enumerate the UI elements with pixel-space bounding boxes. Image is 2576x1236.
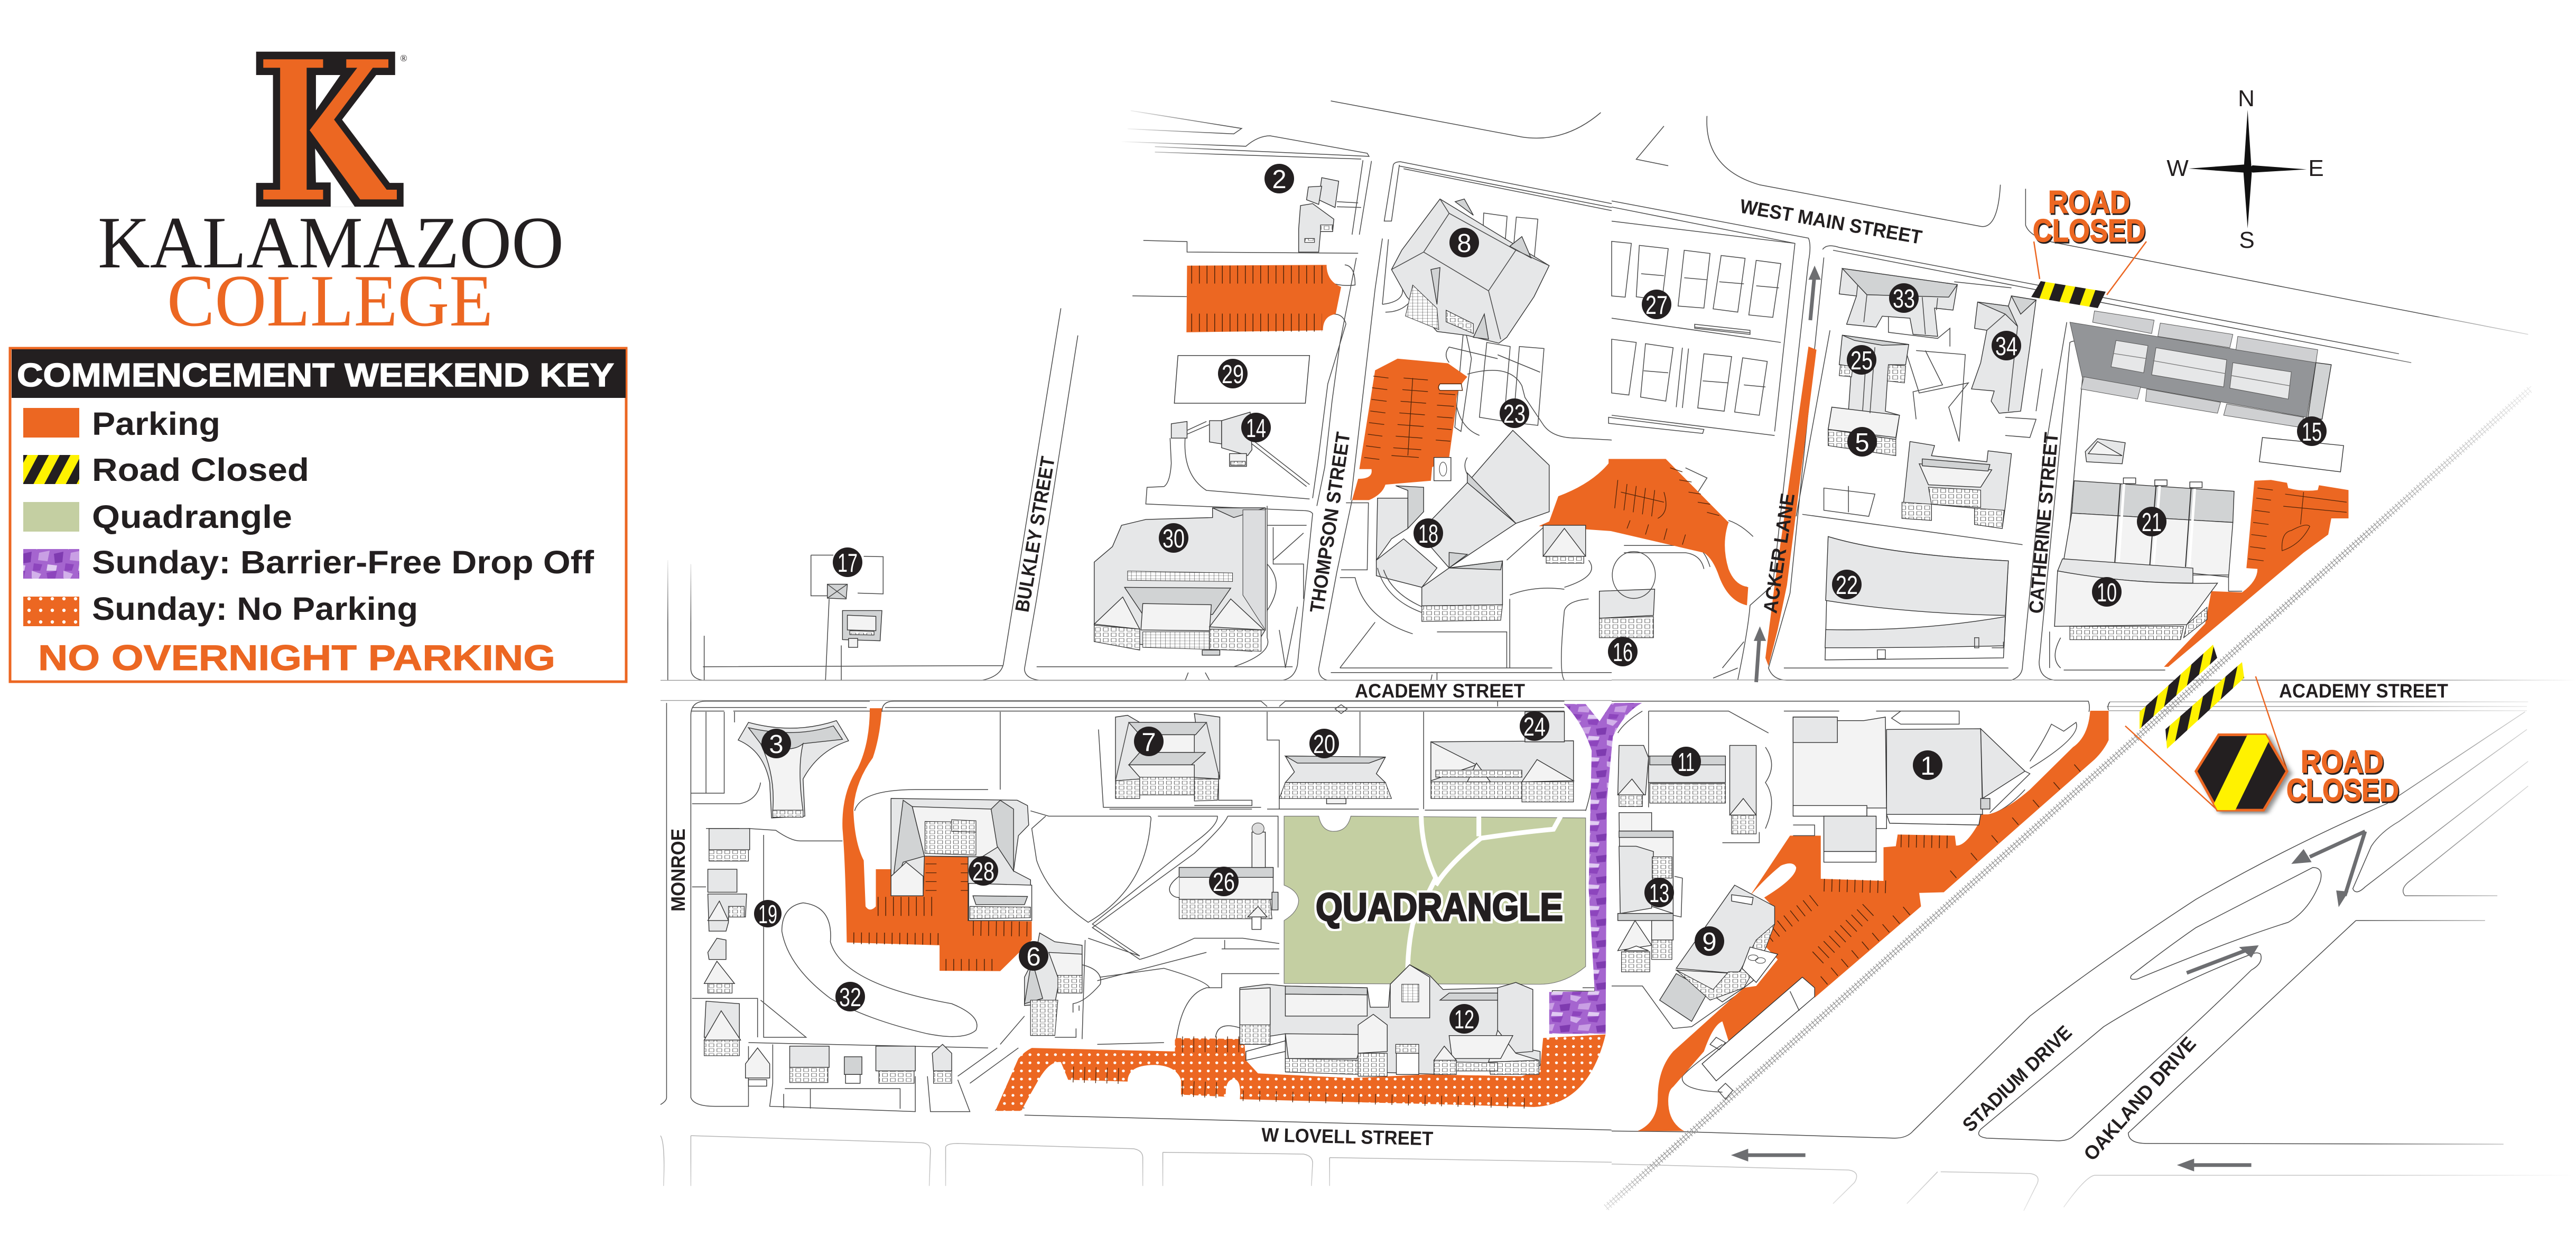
building 9	[1660, 885, 1778, 1021]
road closed label	[2286, 744, 2399, 808]
road closed label: CLOSED	[2033, 213, 2145, 248]
marker 1	[1913, 750, 1942, 780]
compass rose: S	[2239, 227, 2255, 253]
key item: no parking: Sunday: No Parking	[92, 591, 418, 627]
campus map	[655, 86, 2576, 1236]
marker 15: 15	[2302, 418, 2322, 447]
label: Catherine Street: CATHERINE STREET	[2025, 431, 2062, 615]
compass rose: W	[2166, 155, 2189, 181]
marker 28: 28	[972, 858, 994, 886]
parking: lot east of building 21	[2164, 480, 2348, 667]
marker 3	[761, 729, 791, 759]
marker 27: 27	[1645, 291, 1668, 320]
marker 8	[1449, 228, 1479, 258]
road closed label: ROAD	[2048, 184, 2130, 220]
building 3	[738, 721, 849, 818]
marker 2	[1264, 164, 1294, 194]
small house south of parking	[1543, 525, 1586, 563]
marker 6: 6	[1026, 943, 1041, 971]
marker 7	[1134, 727, 1164, 757]
marker 5	[1847, 427, 1877, 457]
building 34	[1971, 296, 2036, 413]
tennis courts	[1455, 213, 1781, 433]
marker 10: 10	[2097, 579, 2117, 607]
label: Monroe: MONROE	[667, 829, 689, 912]
marker 8: 8	[1457, 229, 1472, 258]
marker 30: 30	[1163, 525, 1185, 553]
marker 17: 17	[838, 549, 858, 578]
marker 6	[1019, 941, 1048, 971]
lot by 15	[2259, 438, 2343, 472]
building 24	[1431, 712, 1574, 802]
building 13	[1618, 813, 1682, 972]
marker 25: 25	[1850, 347, 1873, 375]
parking: north lot by Thompson Street	[1186, 265, 1341, 332]
building 17	[811, 555, 883, 647]
arrows: Stadium and Lovell	[1731, 831, 2365, 1172]
parking: lot east of building 18	[1539, 459, 1748, 606]
depot	[1702, 977, 1815, 1099]
road closed label: ROAD	[2301, 744, 2384, 779]
road closed: Academy Street rail crossing	[2125, 645, 2399, 813]
building 10	[2054, 559, 2242, 640]
key item: quadrangle	[23, 499, 292, 535]
traffic direction arrows	[1731, 266, 2365, 1172]
logo wordmark: COLLEGE	[167, 260, 493, 342]
marker 18: 18	[1418, 520, 1438, 549]
key item: barrier-free drop off: Sunday: Barrier-Free Drop Off	[92, 544, 594, 580]
key heading	[12, 349, 626, 398]
numbered building markers	[754, 164, 2327, 1034]
marker 3: 3	[769, 730, 784, 759]
marker 32: 32	[839, 983, 861, 1012]
label: Oakland Drive: OAKLAND DRIVE	[2079, 1033, 2200, 1165]
key item: parking: Parking	[92, 406, 220, 442]
marker 19	[754, 900, 782, 929]
key heading: COMMENCEMENT WEEKEND KEY	[17, 357, 614, 394]
marker 20: 20	[1313, 730, 1335, 759]
marker 29: 29	[1222, 360, 1244, 389]
marker 34: 34	[1995, 332, 2017, 361]
quadrangle label: QUADRANGLE	[1316, 885, 1563, 929]
buildings: southwest campus	[704, 712, 1574, 1086]
building 28	[891, 798, 1032, 921]
building 8	[1391, 199, 1549, 343]
railroad tracks	[1606, 386, 2531, 1210]
small house	[2085, 439, 2125, 464]
lawn lot 29	[1174, 356, 1309, 403]
key item: road closed	[23, 452, 309, 488]
building 25 and 5	[1828, 335, 1909, 456]
building 21	[2064, 478, 2234, 577]
marker 19: 19	[758, 900, 777, 929]
parking lots	[842, 265, 2348, 1131]
parking: main lot beside tracks	[1638, 711, 2109, 1131]
label: Thompson Street: THOMPSON STREET	[1306, 431, 1354, 614]
building 11	[1618, 746, 1772, 843]
marker 24: 24	[1523, 713, 1546, 741]
parking: lot beside building 23	[1352, 359, 1467, 500]
road network	[661, 101, 2576, 1211]
compass rose: N	[2238, 86, 2255, 111]
barrier-free drop off zone	[1549, 703, 1642, 1034]
building 16	[1599, 552, 1656, 638]
building 26	[1169, 823, 1278, 930]
logo wordmark: ®	[400, 53, 407, 63]
marker 22: 22	[1836, 571, 1858, 600]
compass rose: E	[2308, 155, 2324, 181]
road closed label: CLOSED	[2286, 773, 2399, 808]
houses along Monroe	[704, 829, 770, 1086]
parking: Sunday no parking zone	[996, 1035, 1606, 1111]
parking: lot beside building 28	[842, 708, 1032, 971]
panel: commencement weekend key	[10, 348, 626, 682]
building 14	[1171, 412, 1252, 467]
quadrangle lawn	[1284, 816, 1586, 984]
label: West Main Street: WEST MAIN STREET	[1738, 195, 1924, 248]
marker 1: 1	[1920, 752, 1935, 780]
logo: Kalamazoo College	[98, 52, 564, 342]
building 1	[1793, 717, 2030, 862]
marker 11	[1671, 747, 1701, 777]
buildings: northeast campus	[1599, 268, 2343, 660]
marker 14: 14	[1246, 414, 1266, 443]
label: Stadium Drive: STADIUM DRIVE	[1958, 1021, 2076, 1136]
barrier stripes: West Main	[2031, 281, 2106, 308]
marker 9	[1695, 926, 1724, 956]
label: Academy Street west: ACADEMY STREET	[1355, 680, 1525, 702]
callout hexagon	[2125, 676, 2287, 813]
building 18	[1377, 430, 1549, 621]
marker 11: 11	[1678, 748, 1695, 777]
key item: quadrangle: Quadrangle	[92, 499, 292, 535]
building 30	[1094, 508, 1304, 655]
building 20	[1279, 756, 1391, 804]
arrows: Acker Lane	[1754, 266, 1821, 682]
buildings: northwest campus	[811, 178, 1586, 655]
road closed: West Main Street	[2031, 184, 2146, 308]
marker 21: 21	[2142, 508, 2162, 537]
logo wordmark: KALAMAZOO	[98, 202, 564, 284]
road closed label	[2033, 184, 2145, 248]
marker 5: 5	[1855, 429, 1870, 457]
marker 2: 2	[1272, 165, 1287, 194]
logo wordmark	[98, 53, 564, 342]
compass rose	[2166, 86, 2324, 253]
building 6	[1025, 933, 1101, 1037]
barrier stripes: south	[2165, 662, 2244, 749]
key item: parking	[23, 406, 220, 442]
marker 12: 12	[1454, 1006, 1474, 1034]
marker 26: 26	[1213, 868, 1235, 897]
no overnight parking notice: NO OVERNIGHT PARKING	[38, 638, 555, 678]
callout leader lines	[2034, 241, 2146, 295]
parking structure 15	[2070, 311, 2331, 428]
houses along Lovell	[790, 1044, 952, 1083]
building 22	[1825, 536, 2008, 660]
building 2	[1299, 178, 1338, 252]
marker 9: 9	[1702, 928, 1717, 956]
logo K mark	[256, 52, 404, 207]
building 33	[1839, 268, 1957, 337]
label: Academy Street east: ACADEMY STREET	[2279, 680, 2448, 702]
building 7	[1115, 713, 1252, 805]
light stand	[1434, 458, 1451, 481]
label: Acker Lane: ACKER LANE	[1759, 492, 1799, 615]
street labels	[667, 195, 2448, 1165]
label: Bulkley Street: BULKLEY STREET	[1011, 454, 1059, 614]
parking: Acker Lane strip	[1765, 347, 1817, 666]
building 12	[1240, 965, 1540, 1076]
residence hall	[1902, 442, 2012, 528]
marker 33: 33	[1893, 285, 1915, 313]
marker 13: 13	[1649, 879, 1669, 908]
barrier stripes: north	[2140, 645, 2217, 729]
marker 7: 7	[1141, 728, 1156, 757]
marker 23: 23	[1503, 400, 1526, 429]
buildings: southeast campus	[1618, 717, 2030, 1099]
label: W Lovell Street: W LOVELL STREET	[1261, 1124, 1434, 1149]
key item: road closed: Road Closed	[92, 452, 309, 488]
marker 16: 16	[1613, 638, 1633, 667]
